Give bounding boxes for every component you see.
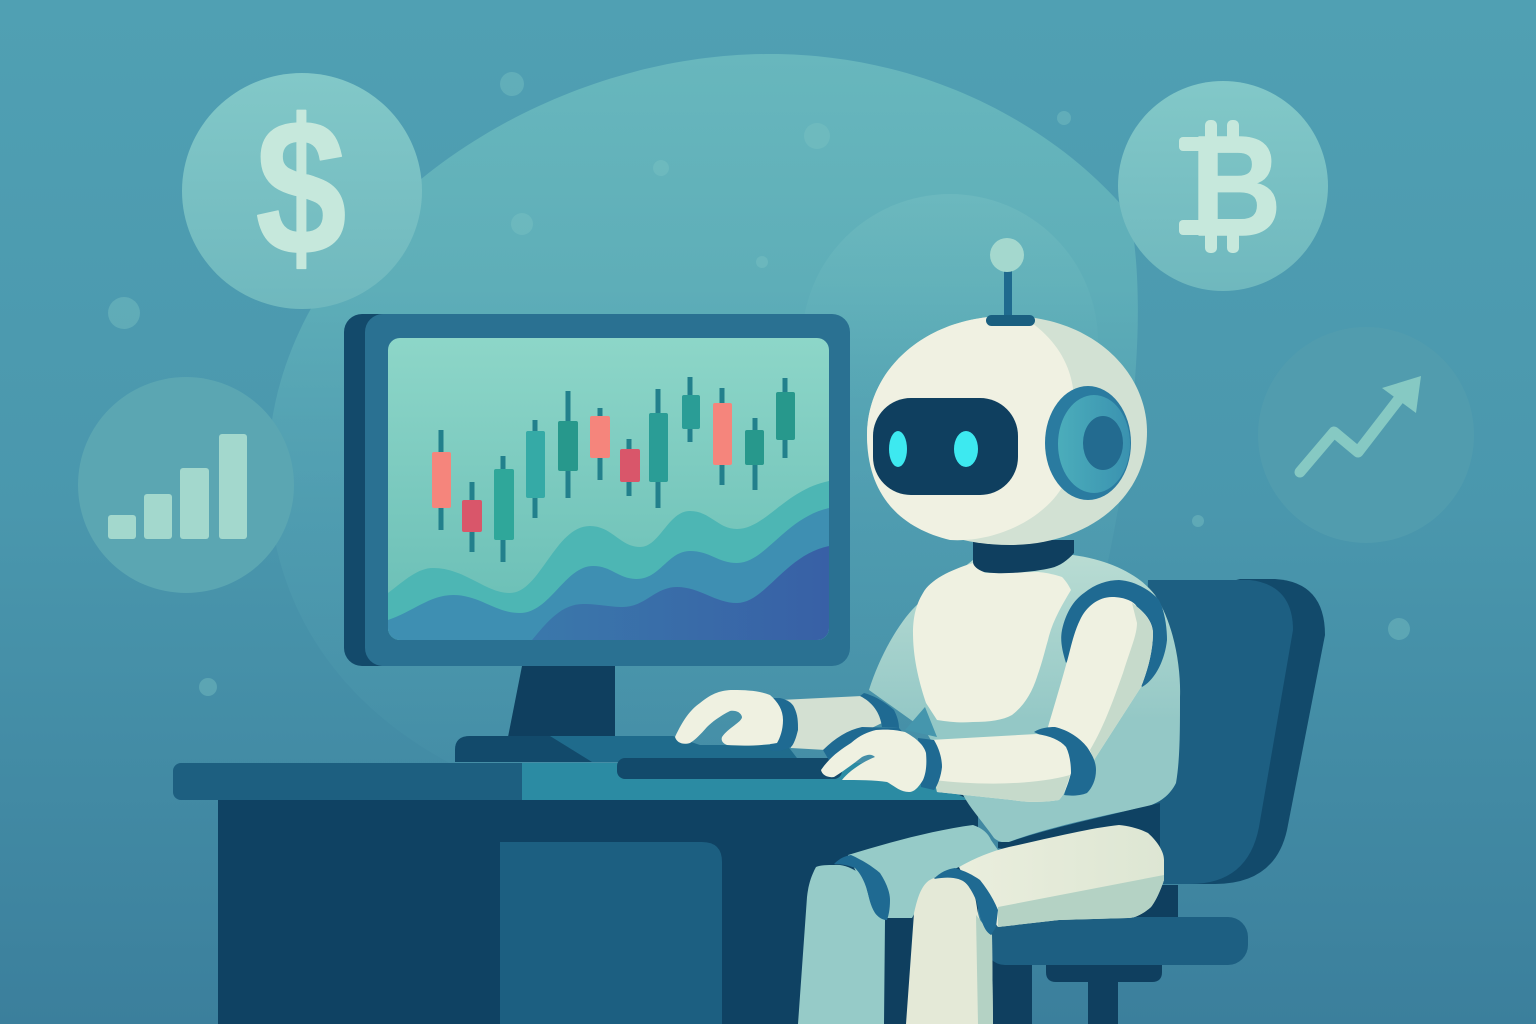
robot torso back [869, 555, 1180, 843]
robot front lower leg shade [976, 915, 993, 1024]
robot upper arm [1048, 597, 1153, 760]
chair column dark [1120, 885, 1178, 925]
background dome [268, 54, 1138, 834]
chair under-seat [985, 960, 1032, 1024]
robot shoulder ring [1061, 580, 1167, 687]
icon: bar chart coin [78, 377, 294, 593]
robot lower arm [930, 734, 1071, 802]
robot lower arm shade [934, 775, 1070, 802]
keyboard [617, 758, 842, 779]
robot eyes [889, 431, 978, 467]
robot back lower leg [798, 865, 885, 1024]
robot visor [873, 398, 1018, 495]
robot front thigh shade [998, 875, 1164, 927]
icon: dollar coin [182, 73, 422, 309]
robot face highlight [867, 316, 1074, 540]
robot back wrist cuff [770, 698, 798, 751]
robot front thigh [959, 825, 1164, 927]
chart wave: indigo [532, 546, 829, 640]
chair seat [985, 917, 1248, 965]
robot back thigh [848, 825, 998, 918]
robot torso cream [913, 563, 1071, 722]
icon: bitcoin coin: B [1191, 106, 1281, 266]
icon: bitcoin coin [1118, 81, 1328, 291]
robot back elbow cuff [860, 693, 899, 728]
desk [173, 763, 978, 1024]
robot torso gap [905, 707, 937, 737]
robot [675, 238, 1180, 1024]
robot back forearm [780, 696, 882, 750]
robot dark leg gap [884, 918, 912, 1024]
monitor base [455, 736, 800, 762]
icon: dollar coin: $ [255, 79, 347, 295]
robot dark wedge under torso [998, 803, 1160, 885]
robot back knee cuff [834, 855, 890, 920]
robot front lower leg [906, 877, 993, 1024]
robot antenna [990, 238, 1024, 320]
chart wave: teal [388, 481, 829, 640]
icon: trend arrow coin [1258, 327, 1474, 543]
monitor screen [388, 338, 829, 640]
robot elbow cuff [1034, 727, 1096, 796]
robot front wrist cuff [918, 738, 942, 790]
robot back hand [675, 690, 783, 746]
chart wave: blue [388, 508, 829, 640]
robot head [867, 315, 1147, 545]
monitor [344, 314, 850, 666]
robot front knee cuff [934, 868, 998, 935]
candlestick chart [432, 377, 795, 562]
robot neck [973, 540, 1074, 573]
monitor stand [508, 666, 615, 737]
robot upper arm shade [1090, 603, 1153, 760]
antenna base [986, 315, 1035, 326]
chair [985, 579, 1325, 1024]
chair back [1160, 579, 1325, 884]
robot front hand rim [823, 727, 905, 762]
robot ear [1045, 386, 1131, 500]
robot front hand [821, 730, 926, 792]
background lobe behind robot [802, 194, 1098, 490]
decorative floating dots [108, 72, 1410, 696]
